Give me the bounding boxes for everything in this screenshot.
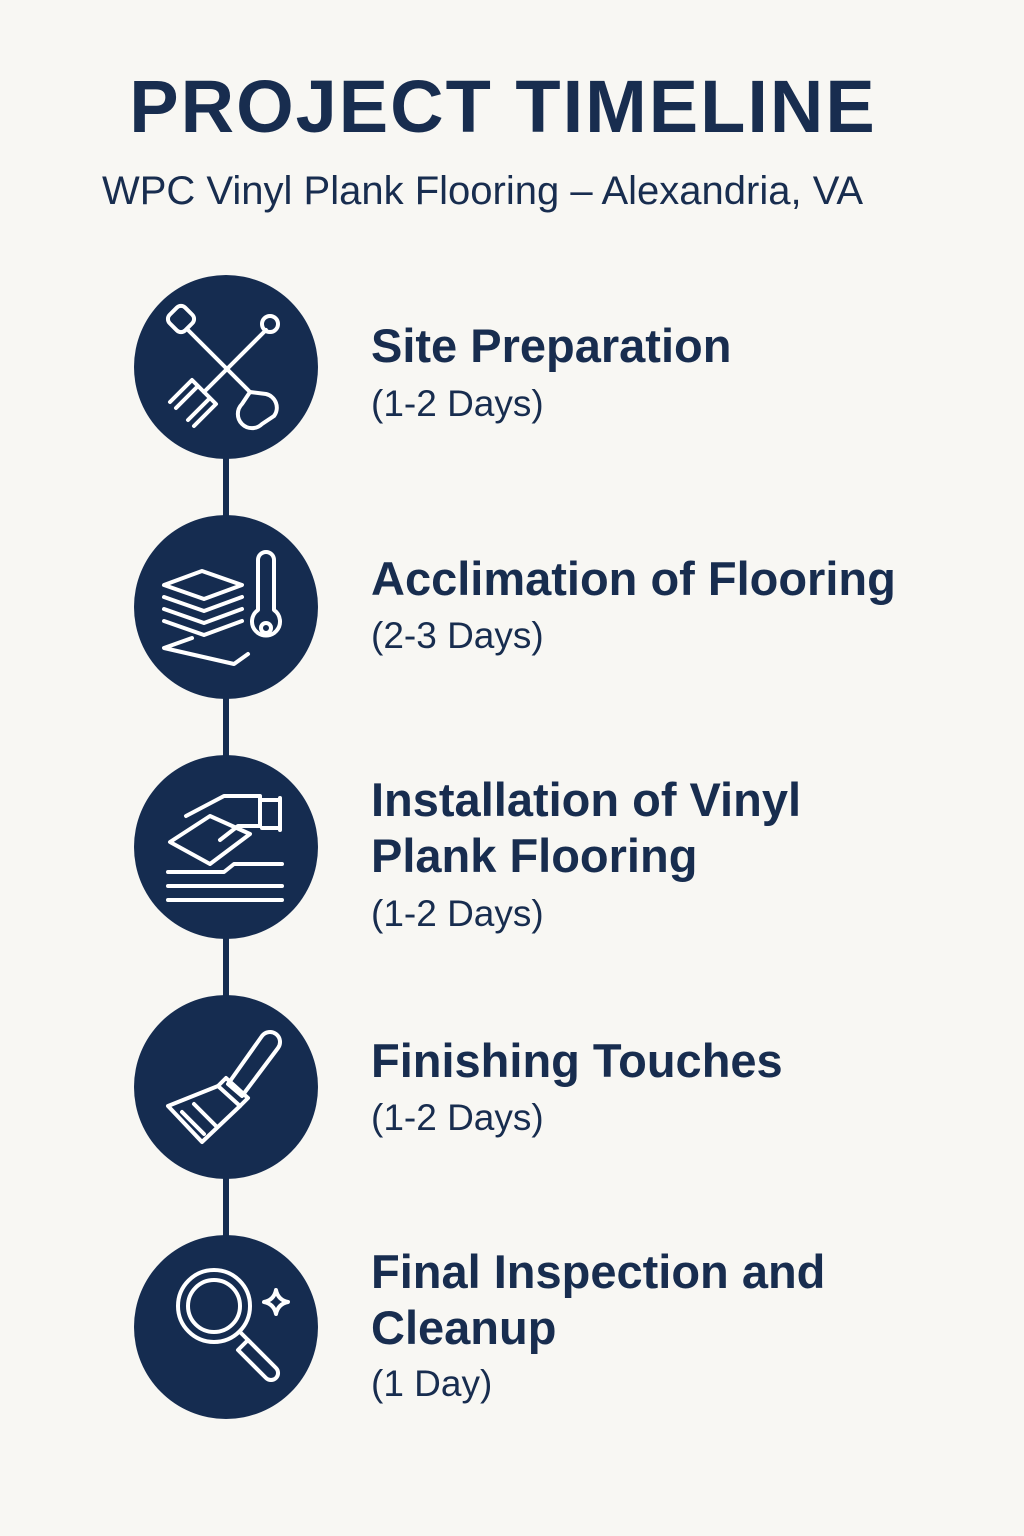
step 4 text: Finishing Touches <box>371 1034 783 1087</box>
step 1 text: Site Preparation <box>371 319 731 372</box>
step 4 text: (1-2 Days) <box>371 1097 544 1138</box>
step 5 text: Final Inspection and <box>371 1245 825 1298</box>
step 3 text: Plank Flooring <box>371 829 697 882</box>
step 3 text: Installation of Vinyl <box>371 773 801 826</box>
step 2 text <box>371 552 896 656</box>
icon: site preparation tools <box>134 275 318 459</box>
step 5 text: (1 Day) <box>371 1363 492 1404</box>
icon: magnifying glass <box>134 1235 318 1419</box>
step 2 text: (2-3 Days) <box>371 615 544 656</box>
icon: installation hand and plank <box>134 755 318 939</box>
step 4 text <box>371 1034 783 1138</box>
subtitle: WPC Vinyl Plank Flooring – Alexandria, VA <box>102 169 863 213</box>
step 5 text: Cleanup <box>371 1301 556 1354</box>
title: PROJECT TIMELINE <box>129 65 877 148</box>
step 5 text <box>371 1245 825 1404</box>
icon: acclimation planks and thermometer <box>134 515 318 699</box>
step 1 text <box>371 319 731 424</box>
step 2 text: Acclimation of Flooring <box>371 552 896 605</box>
step 3 text: (1-2 Days) <box>371 893 544 934</box>
step 3 text <box>371 773 801 934</box>
connector line <box>223 367 229 1327</box>
icon: paintbrush <box>134 995 318 1179</box>
step 1 text: (1-2 Days) <box>371 383 544 424</box>
